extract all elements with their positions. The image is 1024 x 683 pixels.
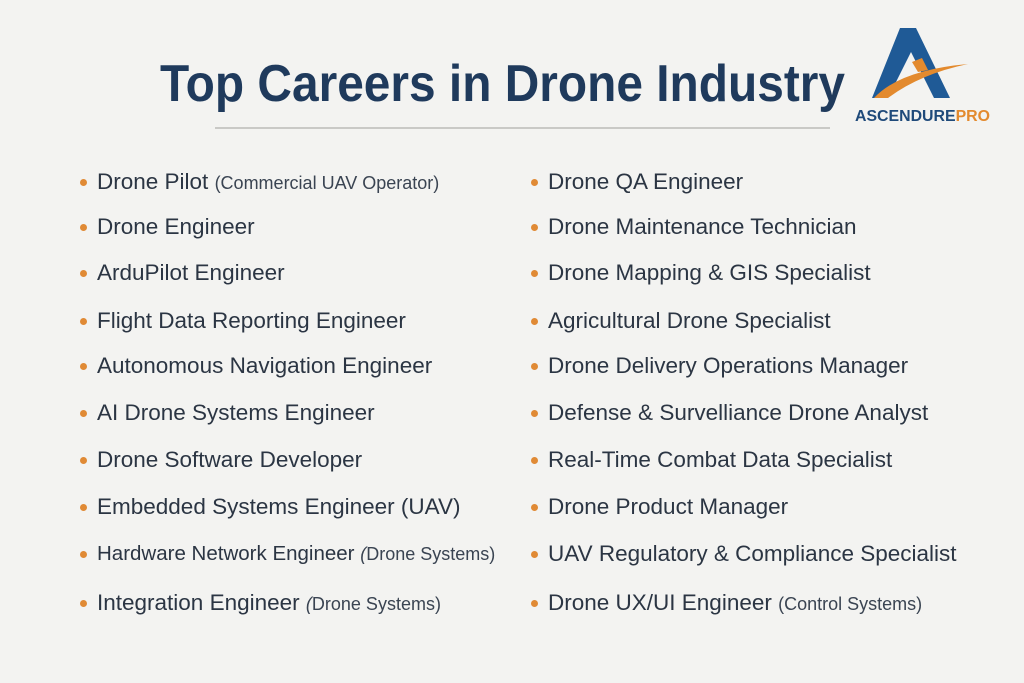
title: Top Careers in Drone Industry (160, 55, 845, 113)
text: Agricultural Drone Specialist (548, 308, 831, 333)
text: Drone Maintenance Technician (548, 214, 857, 239)
text: Drone Pilot (Commercial UAV Operator) (97, 169, 439, 194)
text: ArduPilot Engineer (97, 260, 285, 285)
text: Drone Engineer (97, 214, 255, 239)
text: Hardware Network Engineer (Drone Systems) (97, 542, 495, 565)
text: Drone UX/UI Engineer (Control Systems) (548, 590, 922, 615)
list: right column (531, 169, 957, 615)
text: Drone QA Engineer (548, 169, 743, 194)
text: Drone Product Manager (548, 494, 788, 519)
text: Integration Engineer (Drone Systems) (97, 590, 441, 615)
text: Drone Delivery Operations Manager (548, 353, 908, 378)
logo: ASCENDUREPRO (855, 108, 990, 125)
list: left column (80, 169, 495, 615)
text: Real-Time Combat Data Specialist (548, 447, 892, 472)
text: UAV Regulatory & Compliance Specialist (548, 541, 957, 566)
text: Autonomous Navigation Engineer (97, 353, 432, 378)
text: Defense & Survelliance Drone Analyst (548, 400, 928, 425)
text: Drone Software Developer (97, 447, 362, 472)
text: Flight Data Reporting Engineer (97, 308, 406, 333)
text: Drone Mapping & GIS Specialist (548, 260, 871, 285)
text: AI Drone Systems Engineer (97, 400, 375, 425)
logo (855, 28, 990, 125)
icon: A mark (872, 28, 968, 98)
text: Embedded Systems Engineer (UAV) (97, 494, 460, 519)
